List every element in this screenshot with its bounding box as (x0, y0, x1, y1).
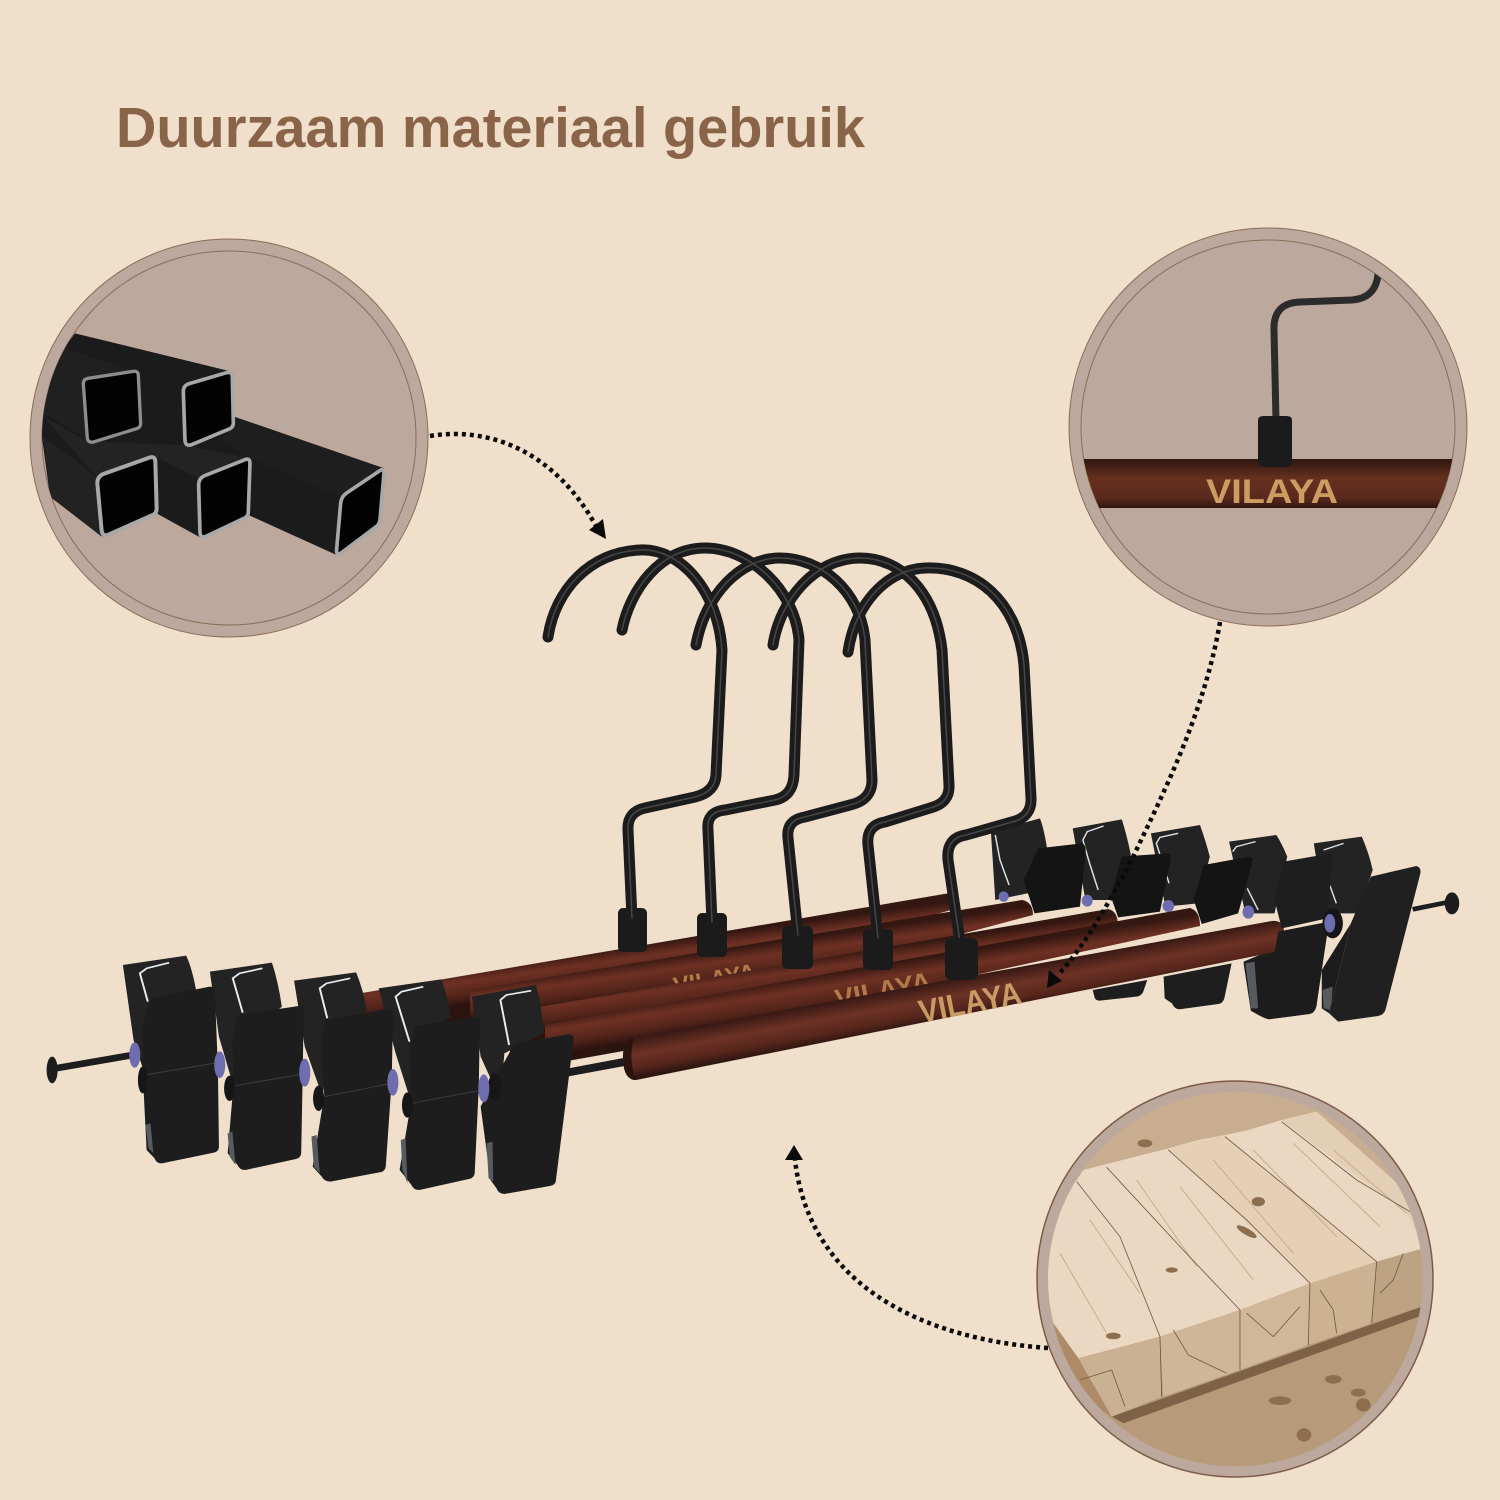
lower right clip jaws behind bars (1093, 927, 1327, 1019)
steel springs (140, 963, 531, 1045)
panel: steel tubes detail circle (30, 239, 428, 637)
pin (52, 1055, 133, 1069)
front jaws (143, 987, 574, 1194)
hinge knobs (138, 1067, 501, 1118)
wooden bar close-up (1070, 274, 1470, 511)
rear jaws (123, 956, 544, 1103)
rod left to bars (565, 1059, 640, 1073)
arrow: wood detail to bars (785, 1145, 1048, 1348)
hook caps (618, 908, 893, 970)
faint brand mark hanger two: VILAYA (671, 959, 758, 1000)
right clips front parts (1024, 843, 1253, 924)
front wooden bar (623, 921, 1284, 1080)
hook cap (1258, 416, 1292, 467)
title: Duurzaam materiaal gebruik (116, 96, 865, 160)
faint brand mark hanger four: VILAYA (832, 966, 934, 1015)
arrow: hook detail to front bar (1047, 622, 1220, 988)
icon: hook wire (1274, 274, 1378, 420)
arrow: steel tubes to hook (430, 434, 606, 539)
photo: wood beams (1048, 1092, 1422, 1466)
panel: solid wood detail circle (1037, 1080, 1440, 1480)
right clips rear parts (991, 818, 1373, 919)
brand mark: VILAYA (1206, 473, 1338, 511)
hooks (548, 548, 1031, 942)
wooden bars (362, 893, 1200, 1065)
brand mark on front bar: VILAYA (915, 975, 1024, 1030)
plastic washers (129, 1042, 489, 1102)
panel: hook and wooden bar detail circle (1069, 228, 1470, 626)
hanger group (47, 548, 1459, 1194)
side spring shading (145, 1123, 493, 1183)
rod and right outer clips (1244, 853, 1421, 1022)
left clips (47, 956, 574, 1194)
front bar end cap (623, 1037, 636, 1080)
far pin right (1413, 892, 1459, 914)
icon: square steel tubes (42, 333, 384, 555)
jaw hinge highlight (145, 1063, 479, 1103)
front hook cap (945, 938, 978, 980)
